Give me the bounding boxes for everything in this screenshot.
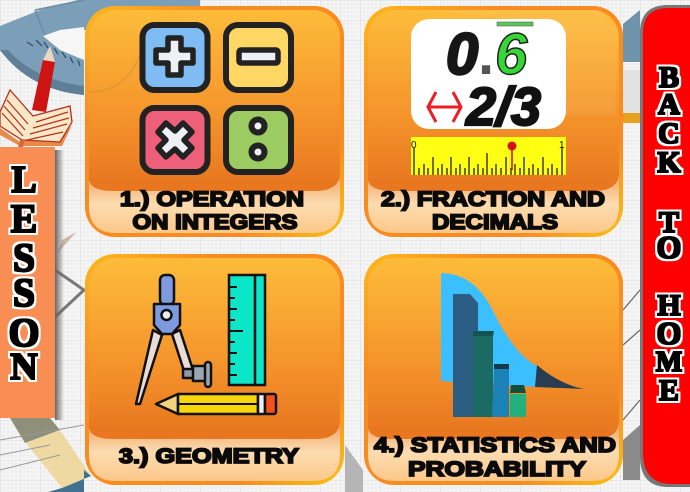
heading: ON INTEGERS: [132, 211, 298, 234]
heading: [381, 188, 605, 234]
number line ruler: 1: [559, 140, 565, 151]
white fraction box: [411, 19, 566, 137]
eraser: [10, 418, 60, 443]
panel: back to home: [640, 5, 690, 487]
heading: [120, 188, 304, 234]
heading: PROBABILITY: [408, 458, 586, 481]
icon: red double arrow: [428, 92, 461, 122]
back to home text: C: [658, 117, 680, 150]
heading: [374, 434, 616, 481]
back to home text: T: [659, 206, 679, 239]
heading: 2.) FRACTION AND: [381, 188, 605, 211]
heading: 4.) STATISTICS AND: [374, 434, 616, 457]
panel: lesson sidebar: [0, 46, 72, 420]
heading: 3.) GEOMETRY: [119, 445, 299, 468]
back to home text: A: [658, 88, 680, 121]
icon: divide: [226, 108, 291, 172]
translucent light streak: [430, 10, 618, 115]
back to home text: K: [657, 146, 681, 179]
icon: plus: [142, 25, 208, 90]
back to home text: B: [659, 61, 679, 94]
back to home text: O: [657, 229, 681, 265]
number line ruler: [411, 137, 566, 175]
lesson text: L: [11, 159, 37, 201]
white fraction box: .: [478, 22, 494, 87]
heading: DECIMALS: [432, 211, 558, 234]
white fraction box: 2/3: [465, 77, 541, 137]
icon: minus: [226, 25, 291, 90]
icon: open book: [0, 90, 72, 147]
lesson text: S: [13, 235, 35, 280]
back to home text: H: [657, 289, 681, 322]
panel: 2 fraction and decimals: [364, 6, 623, 237]
back to home text: [656, 61, 682, 407]
faint protractor through card: [89, 55, 140, 92]
panel: 1 operation on integers: [85, 6, 344, 237]
lesson text: E: [11, 196, 37, 241]
heading: 1.) OPERATION: [120, 188, 304, 211]
white fraction box: 6: [495, 22, 528, 87]
lesson text: N: [10, 346, 38, 388]
chart: distribution curve with bars: [441, 273, 585, 417]
panel: 4 statistics and probability: [364, 254, 623, 485]
number line ruler: 0: [411, 140, 417, 151]
lesson text: S: [13, 270, 35, 315]
icon: red pencil: [32, 46, 55, 112]
panel: 3 geometry: [85, 254, 344, 485]
icon: pencil: [156, 394, 276, 414]
white fraction box: 0: [446, 22, 478, 87]
icon: times: [142, 108, 208, 172]
back to home text: O: [657, 315, 681, 351]
back to home text: E: [659, 374, 679, 407]
lesson text: [8, 159, 40, 388]
icon: ruler: [229, 275, 265, 385]
icon: compass: [136, 275, 211, 404]
back to home text: M: [656, 347, 682, 378]
lesson text: O: [8, 310, 40, 355]
